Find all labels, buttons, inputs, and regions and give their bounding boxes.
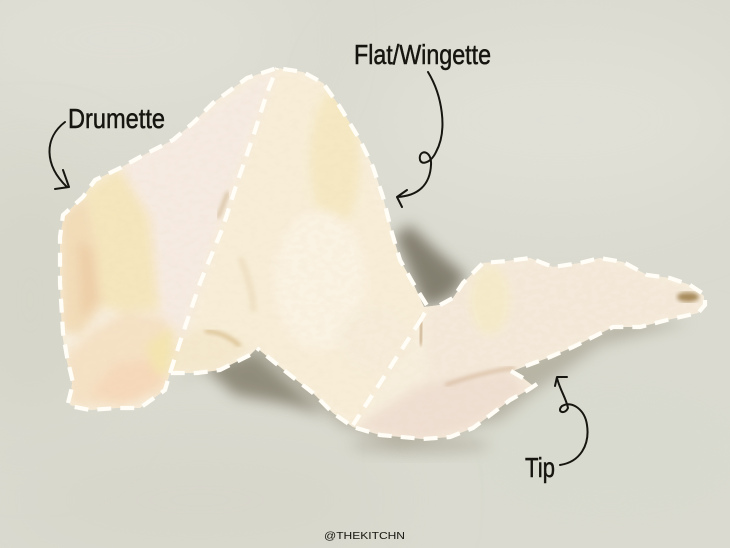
label: Flat/Wingette: Flat/Wingette: [354, 39, 491, 70]
dashed divider: flat and tip: [353, 318, 422, 425]
flap crease: [205, 331, 240, 346]
exposed meat: [66, 312, 175, 408]
crease at drumette: [218, 192, 228, 218]
arrow: to drumette: [49, 122, 69, 189]
drumette upper skin: [120, 68, 277, 373]
credit: @THEKITCHN: [324, 530, 405, 542]
dashed outline: wing: [60, 68, 705, 439]
crease on tip: [445, 368, 515, 385]
flat section: [262, 244, 424, 398]
dashed divider: drumette and flat: [170, 68, 277, 373]
drumette yellow skin: [85, 168, 160, 312]
tip section: [425, 258, 702, 400]
cut bone edge: [60, 195, 103, 335]
arrow: to tip: [555, 377, 588, 465]
underside flap: [170, 328, 252, 373]
chicken wing: [60, 68, 704, 439]
label: Drumette: Drumette: [68, 103, 165, 134]
label: Tip: Tip: [525, 452, 555, 483]
shadow under wing: [170, 225, 690, 454]
skin texture: [40, 50, 720, 450]
arrow: to flat: [397, 72, 442, 207]
fold in flat section: [240, 257, 254, 312]
